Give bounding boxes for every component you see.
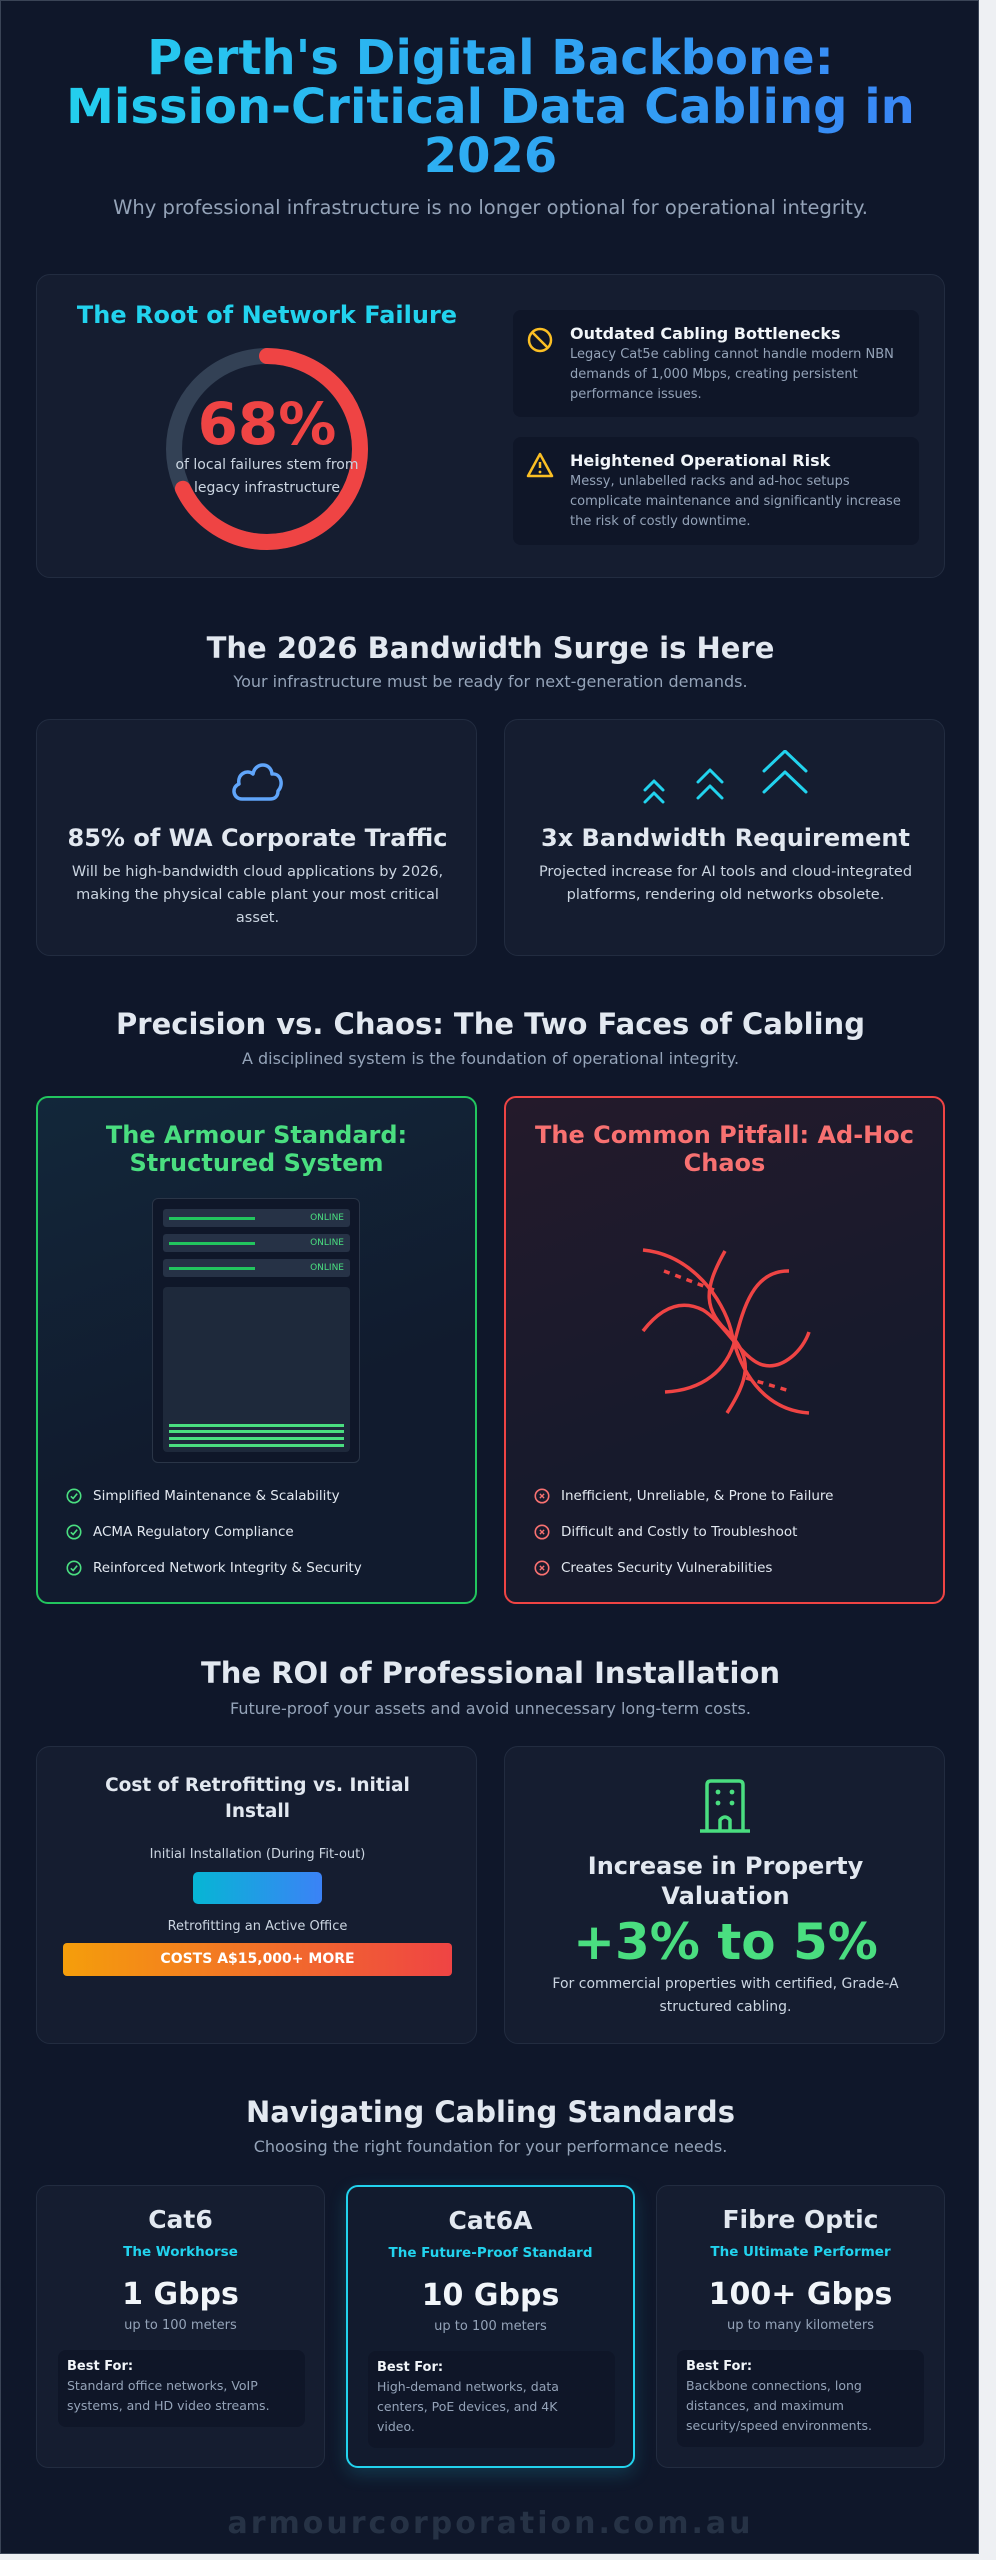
best for box: Best For: [377, 2360, 443, 2375]
body: Will be high-bandwidth cloud applications by 2026, making the physical cable plant your most critical asset. [72, 864, 443, 926]
body: Projected increase for AI tools and cloud-integrated platforms, rendering old networks obsolete. [539, 864, 912, 903]
heading: Increase in Property Valuation [588, 1852, 863, 1910]
subheading: Future-proof your assets and avoid unnecessary long-term costs. [230, 1699, 751, 1718]
card: Cat6A: Cat6A [449, 2206, 532, 2235]
best for box [58, 2350, 305, 2427]
subheading: Your infrastructure must be ready for next-generation demands. [233, 672, 748, 691]
text: Messy, unlabelled racks and ad-hoc setups complicate maintenance and significantly increase the risk of costly downtime. [570, 474, 901, 529]
icon: warning [526, 452, 554, 478]
best for box: Backbone connections, long distances, and maximum security/speed environments. [686, 2378, 872, 2433]
problems list: Inefficient, Unreliable, & Prone to Failure [561, 1488, 833, 1504]
heading: bandwidth surge: The 2026 Bandwidth Surge is Here [207, 631, 774, 665]
title: Mission-Critical Data Cabling in [66, 79, 915, 135]
best for box: Standard office networks, VoIP systems, and HD video streams. [67, 2378, 270, 2413]
bar: retrofit: COSTS A$15,000+ MORE [160, 1951, 355, 1967]
icon: tangled cables [642, 1248, 811, 1415]
footer: website: armourcorporation.com.au [227, 2506, 754, 2541]
card: Cat6: 1 Gbps [122, 2277, 239, 2312]
best for box: High-demand networks, data centers, PoE devices, and 4K video. [377, 2379, 559, 2434]
heading: Cost of Retrofitting vs. Initial Install [105, 1775, 410, 1822]
benefits list [66, 1488, 362, 1576]
card: Fibre Optic: Fibre Optic [722, 2205, 879, 2234]
card: 3x bandwidth [504, 719, 945, 956]
text: Legacy Cat5e cabling cannot handle modern NBN demands of 1,000 Mbps, creating persistent performance issues. [570, 347, 894, 402]
text: Heightened Operational Risk [570, 451, 830, 470]
bar label: initial: Initial Installation (During Fit-out) [150, 1847, 365, 1862]
caption [175, 457, 359, 496]
caption: of local failures stem from [175, 457, 359, 473]
icon: cloud [232, 763, 283, 801]
icon: server rack: ONLINE [310, 1263, 344, 1273]
heading: The Armour Standard: [106, 1121, 407, 1149]
body: For commercial properties with certified, Grade-A structured cabling. [552, 1976, 899, 2015]
heading: Structured System [129, 1149, 384, 1177]
text: Outdated Cabling Bottlenecks [570, 324, 840, 343]
donut chart 68% [166, 348, 368, 550]
icon: server rack: ONLINE [310, 1213, 344, 1223]
subheading: A disciplined system is the foundation of operational integrity. [242, 1049, 739, 1068]
bar label: retrofit: Retrofitting an Active Office [168, 1919, 347, 1934]
bar: initial [193, 1872, 322, 1904]
card: Fibre Optic: The Ultimate Performer [710, 2244, 891, 2260]
bar: retrofit [63, 1943, 452, 1976]
title [21, 34, 960, 181]
benefits list: Simplified Maintenance & Scalability [93, 1488, 340, 1504]
stat heading: 3x Bandwidth Requirement [541, 824, 910, 852]
card: Cat6A: up to 100 meters [434, 2319, 547, 2334]
benefits list: Reinforced Network Integrity & Security [93, 1560, 362, 1576]
problems list: Difficult and Costly to Troubleshoot [561, 1524, 797, 1540]
card: Cat6: The Workhorse [123, 2244, 238, 2260]
heading: root of failure: The Root of Network Failure [77, 301, 457, 329]
heading: Chaos [684, 1149, 765, 1177]
card: Cat6A [346, 2185, 635, 2468]
panel: ad-hoc chaos [504, 1096, 945, 1604]
subheading: Choosing the right foundation for your performance needs. [254, 2137, 727, 2156]
heading: precision vs chaos: Precision vs. Chaos: The Two Faces of Cabling [116, 1007, 865, 1041]
card: outdated cabling [513, 310, 919, 417]
heading: standards: Navigating Cabling Standards [246, 2095, 735, 2129]
panel: root of network failure [36, 274, 945, 578]
stat heading: 85% of WA Corporate Traffic [68, 824, 447, 852]
stat: 68%: 68% [198, 390, 336, 458]
problems list: Creates Security Vulnerabilities [561, 1560, 772, 1576]
card: Cat6A: 10 Gbps [422, 2278, 559, 2313]
problems list [534, 1488, 833, 1576]
heading: The Common Pitfall: Ad-Hoc [535, 1121, 914, 1149]
benefits list: ACMA Regulatory Compliance [93, 1524, 294, 1540]
title: 2026 [424, 128, 557, 184]
best for box [368, 2351, 615, 2448]
card: Cat6A: The Future-Proof Standard [388, 2245, 592, 2261]
subtitle: Why professional infrastructure is no longer optional for operational integrity. [113, 196, 868, 219]
best for box: Best For: [686, 2359, 752, 2374]
icon: rising chevrons [643, 750, 808, 804]
card: retrofit cost comparison [36, 1746, 477, 2044]
card: Fibre Optic [656, 2185, 945, 2468]
icon: server rack: ONLINE [310, 1238, 344, 1248]
card: Fibre Optic: up to many kilometers [727, 2318, 874, 2333]
card: 85% corporate traffic [36, 719, 477, 956]
caption: legacy infrastructure [194, 480, 340, 496]
card: Cat6 [36, 2185, 325, 2468]
card: operational risk [513, 437, 919, 545]
icon: server rack [152, 1198, 360, 1463]
heading [106, 1121, 407, 1177]
stat: +3% to 5% [573, 1913, 878, 1971]
card: property valuation [504, 1746, 945, 2044]
best for box: Best For: [67, 2359, 133, 2374]
card: Cat6: up to 100 meters [124, 2318, 237, 2333]
icon: no sign [528, 328, 552, 352]
icon: building [700, 1779, 750, 1833]
card: Fibre Optic: 100+ Gbps [709, 2277, 892, 2312]
best for box [677, 2350, 924, 2447]
heading [535, 1121, 914, 1177]
title: Perth's Digital Backbone: [147, 30, 834, 86]
panel: armour standard [36, 1096, 477, 1604]
card: Cat6: Cat6 [148, 2205, 213, 2234]
heading: ROI: The ROI of Professional Installation [201, 1656, 780, 1690]
